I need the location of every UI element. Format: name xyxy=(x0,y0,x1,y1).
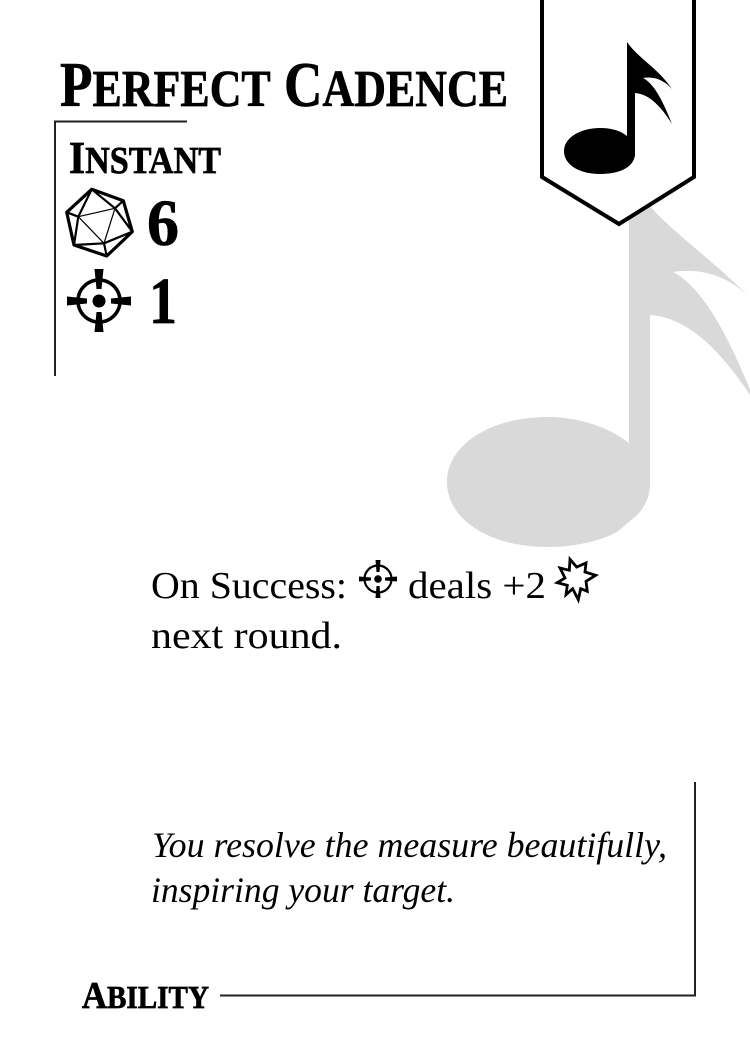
card type label: ABILITY xyxy=(82,975,209,1017)
background watermark: music note xyxy=(447,169,750,547)
effect text xyxy=(151,559,596,657)
flavor text: You resolve the measure beautifully, xyxy=(152,825,667,865)
title: PERFECT CADENCE xyxy=(60,50,508,120)
banner with music note xyxy=(542,0,694,224)
timing label: INSTANT xyxy=(69,132,221,183)
difficulty number: 6 xyxy=(147,187,179,260)
top-left frame xyxy=(55,122,187,376)
bottom-right frame xyxy=(220,782,695,996)
icon: small target xyxy=(359,560,397,598)
icon: d20 die xyxy=(67,189,132,256)
effect text: next round. xyxy=(151,615,342,657)
icon: damage burst xyxy=(557,559,596,600)
range number: 1 xyxy=(149,265,177,338)
effect text: deals +2 xyxy=(408,565,546,607)
flavor text: inspiring your target. xyxy=(151,870,455,910)
icon: target xyxy=(67,269,131,332)
icon: music note xyxy=(564,42,672,174)
effect text: On Success: xyxy=(151,565,347,607)
flavor text xyxy=(151,825,667,910)
